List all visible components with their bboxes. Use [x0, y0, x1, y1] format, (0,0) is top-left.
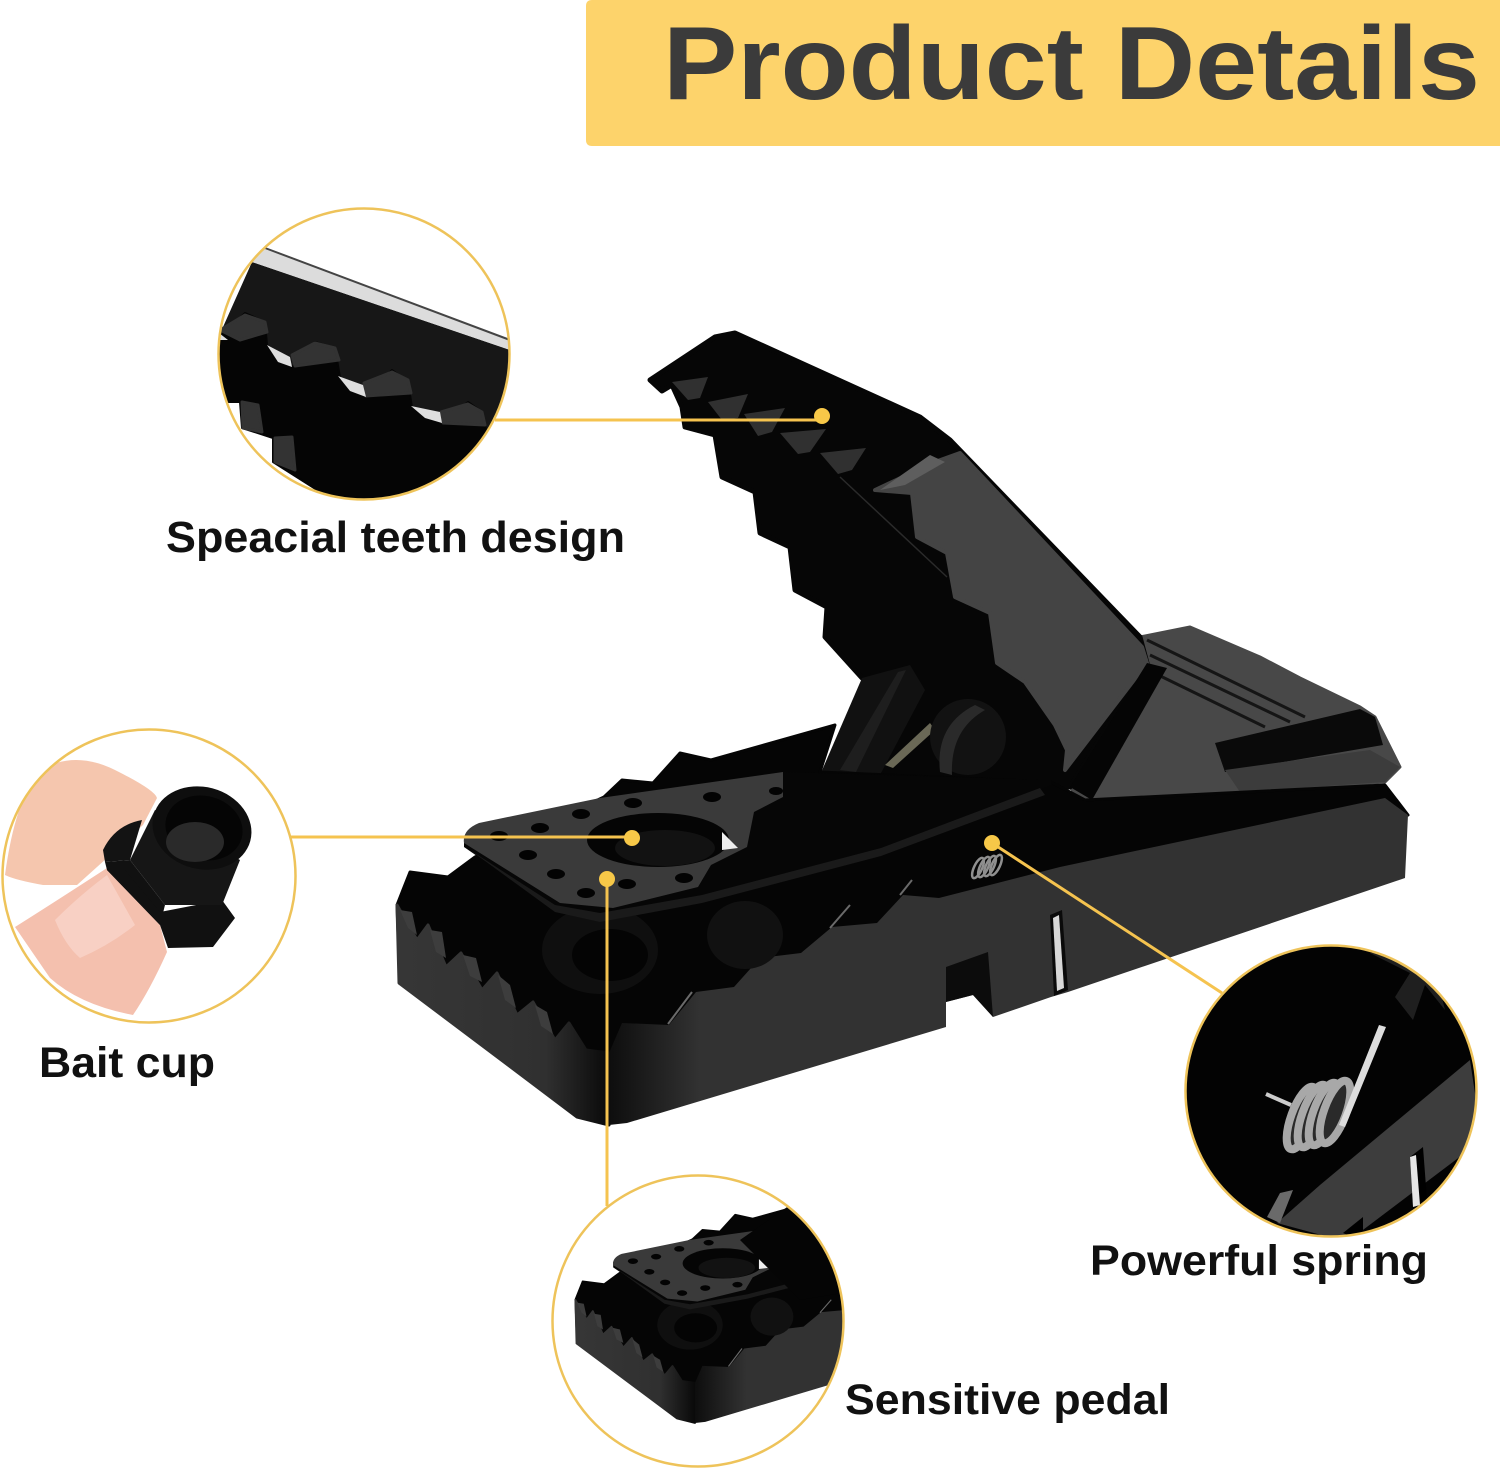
- detail circle: bait cup: [0, 728, 300, 1028]
- front teeth highlights: [668, 880, 912, 1024]
- jaw teeth tips: [672, 377, 866, 474]
- spring: [970, 853, 1004, 880]
- leader line: teeth: [495, 408, 830, 424]
- base front face: [609, 798, 1408, 1125]
- title banner: [586, 0, 1500, 146]
- leader line: bait cup: [290, 830, 640, 846]
- detail circle: spring: [1183, 944, 1482, 1242]
- base left face: [397, 905, 609, 1125]
- base interior: [397, 725, 1408, 1065]
- leader line: pedal: [599, 871, 615, 1206]
- label: teeth: Speacial teeth design: [166, 513, 625, 562]
- pedal plate: [464, 772, 783, 908]
- jaw underside: [650, 333, 1147, 787]
- pedal centre hole: [587, 813, 738, 867]
- rear lever: [1070, 627, 1400, 807]
- spring pin slot: [1050, 910, 1068, 996]
- jaw top face: [875, 453, 1147, 770]
- jaw arm and disc: [820, 665, 925, 775]
- ring under pedal: [542, 901, 783, 994]
- trap base with pedal: [397, 725, 1408, 1125]
- base notch pocket: [946, 952, 993, 1017]
- upper jaw: [650, 333, 1167, 800]
- detail circle: teeth: [215, 205, 515, 505]
- title banner: Product Details: [663, 6, 1480, 122]
- label: spring: Powerful spring: [1090, 1237, 1428, 1285]
- pedal underside: [464, 772, 1051, 920]
- detail circle: pedal: [551, 1174, 845, 1468]
- left teeth highlights: [400, 910, 553, 1034]
- label: bait cup: Bait cup: [39, 1039, 215, 1087]
- label: pedal: Sensitive pedal: [845, 1376, 1170, 1424]
- pedal holes: [490, 787, 783, 898]
- leader line: spring: [984, 835, 1222, 993]
